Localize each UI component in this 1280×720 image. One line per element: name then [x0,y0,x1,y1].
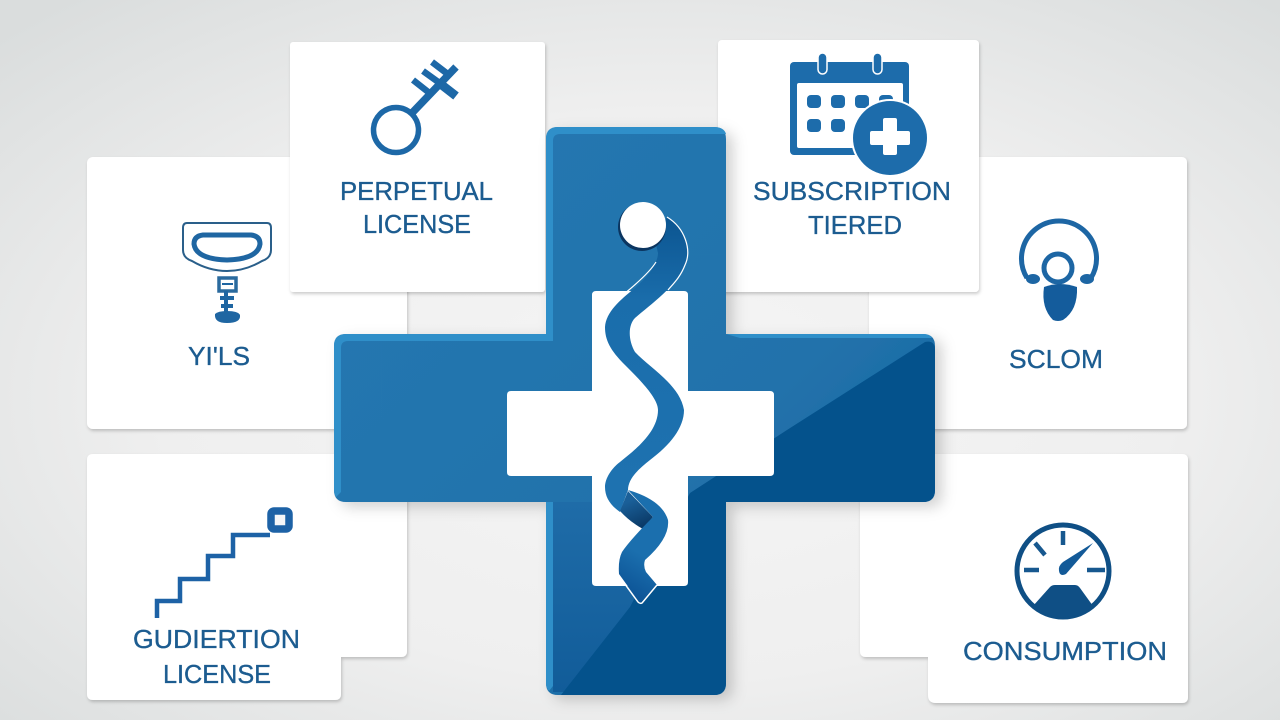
panel: subscription tiered [718,40,979,292]
ribbon fold [620,491,653,529]
card: consumption [860,454,1188,703]
label: license: LICENSE [163,659,271,689]
white inner cross [507,291,774,586]
serpent ribbon [605,217,688,603]
lower arm shading [553,502,673,692]
cross dark diagonal facet [561,342,935,695]
upper ribbon body [605,217,688,512]
icon: gauge [1017,525,1109,617]
card: subscription [718,40,979,292]
label: tiles: YI'LS [188,341,250,371]
ribbon tail edge [622,580,657,603]
label: consumption: CONSUMPTION [963,636,1167,666]
panel: sclom [869,157,1187,429]
panel: tiles [87,157,407,429]
icon: stairs [157,511,289,618]
icon: calendar with plus [790,53,929,177]
card: tiles [87,157,407,429]
icon: key [374,62,456,152]
ribbon middle turn [619,490,668,603]
ribbon white edge [624,217,688,294]
card: sclom [869,157,1187,429]
icon: cup on stand [183,223,271,323]
label: license: LICENSE [363,209,471,239]
label: tiered: TIERED [808,210,902,240]
icon: person with headset arc [1022,221,1096,321]
label: perpetual license: PERPETUAL [340,176,493,206]
card: graduated [87,454,407,700]
panel: perpetual license [290,42,545,292]
center medical cross [334,127,935,695]
label: graduated: GUDIERTION [133,624,300,654]
panel: graduated license [87,454,407,700]
cross highlight edges [334,127,932,691]
panel: consumption [860,454,1188,703]
cross body [334,127,935,695]
serpent head [618,202,666,251]
label: sclom: SCLOM [1009,344,1103,374]
card: perpetual [290,42,545,292]
label: subscription: SUBSCRIPTION [753,176,951,206]
